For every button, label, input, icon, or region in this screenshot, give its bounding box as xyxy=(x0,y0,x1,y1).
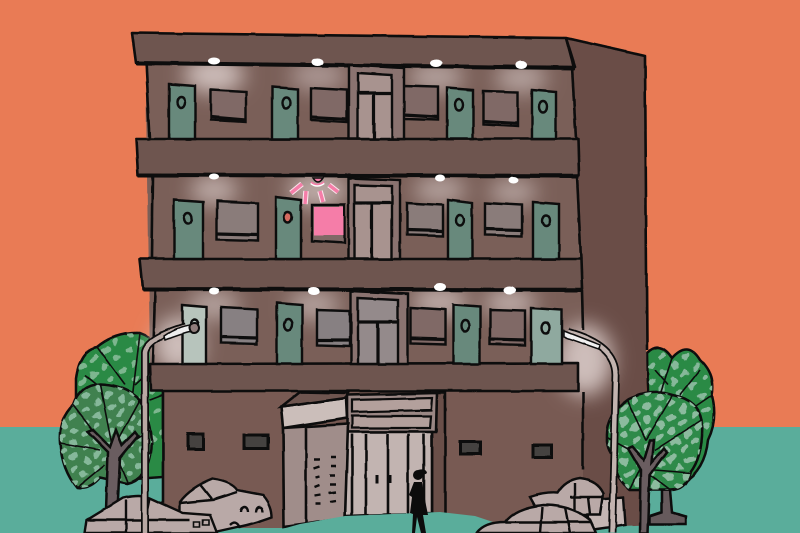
window: lit pink xyxy=(314,207,343,235)
street lamp: right xyxy=(564,331,616,533)
floor 3: doors, windows and lights xyxy=(182,283,562,364)
background: teal ground xyxy=(0,427,800,533)
icon: pink light with rays xyxy=(291,178,338,204)
building: light glows xyxy=(154,57,613,396)
ground floor: small windows xyxy=(188,434,552,457)
cars: right group xyxy=(477,478,625,533)
cars: left group xyxy=(85,479,272,533)
tree: left group xyxy=(58,332,162,508)
ground floor: entrance xyxy=(281,392,445,527)
building xyxy=(132,33,647,528)
floor 2: doors, windows and lights xyxy=(174,174,559,259)
building: fills xyxy=(146,38,647,528)
ground: teal forecourt xyxy=(268,512,512,533)
building: slabs and line work xyxy=(132,33,647,520)
tree: right front xyxy=(606,390,704,533)
street lamp: left xyxy=(145,323,199,533)
floor 1: doors, windows and lights xyxy=(169,58,556,139)
person: silhouette walking xyxy=(409,469,428,533)
tree: right back xyxy=(646,346,716,526)
